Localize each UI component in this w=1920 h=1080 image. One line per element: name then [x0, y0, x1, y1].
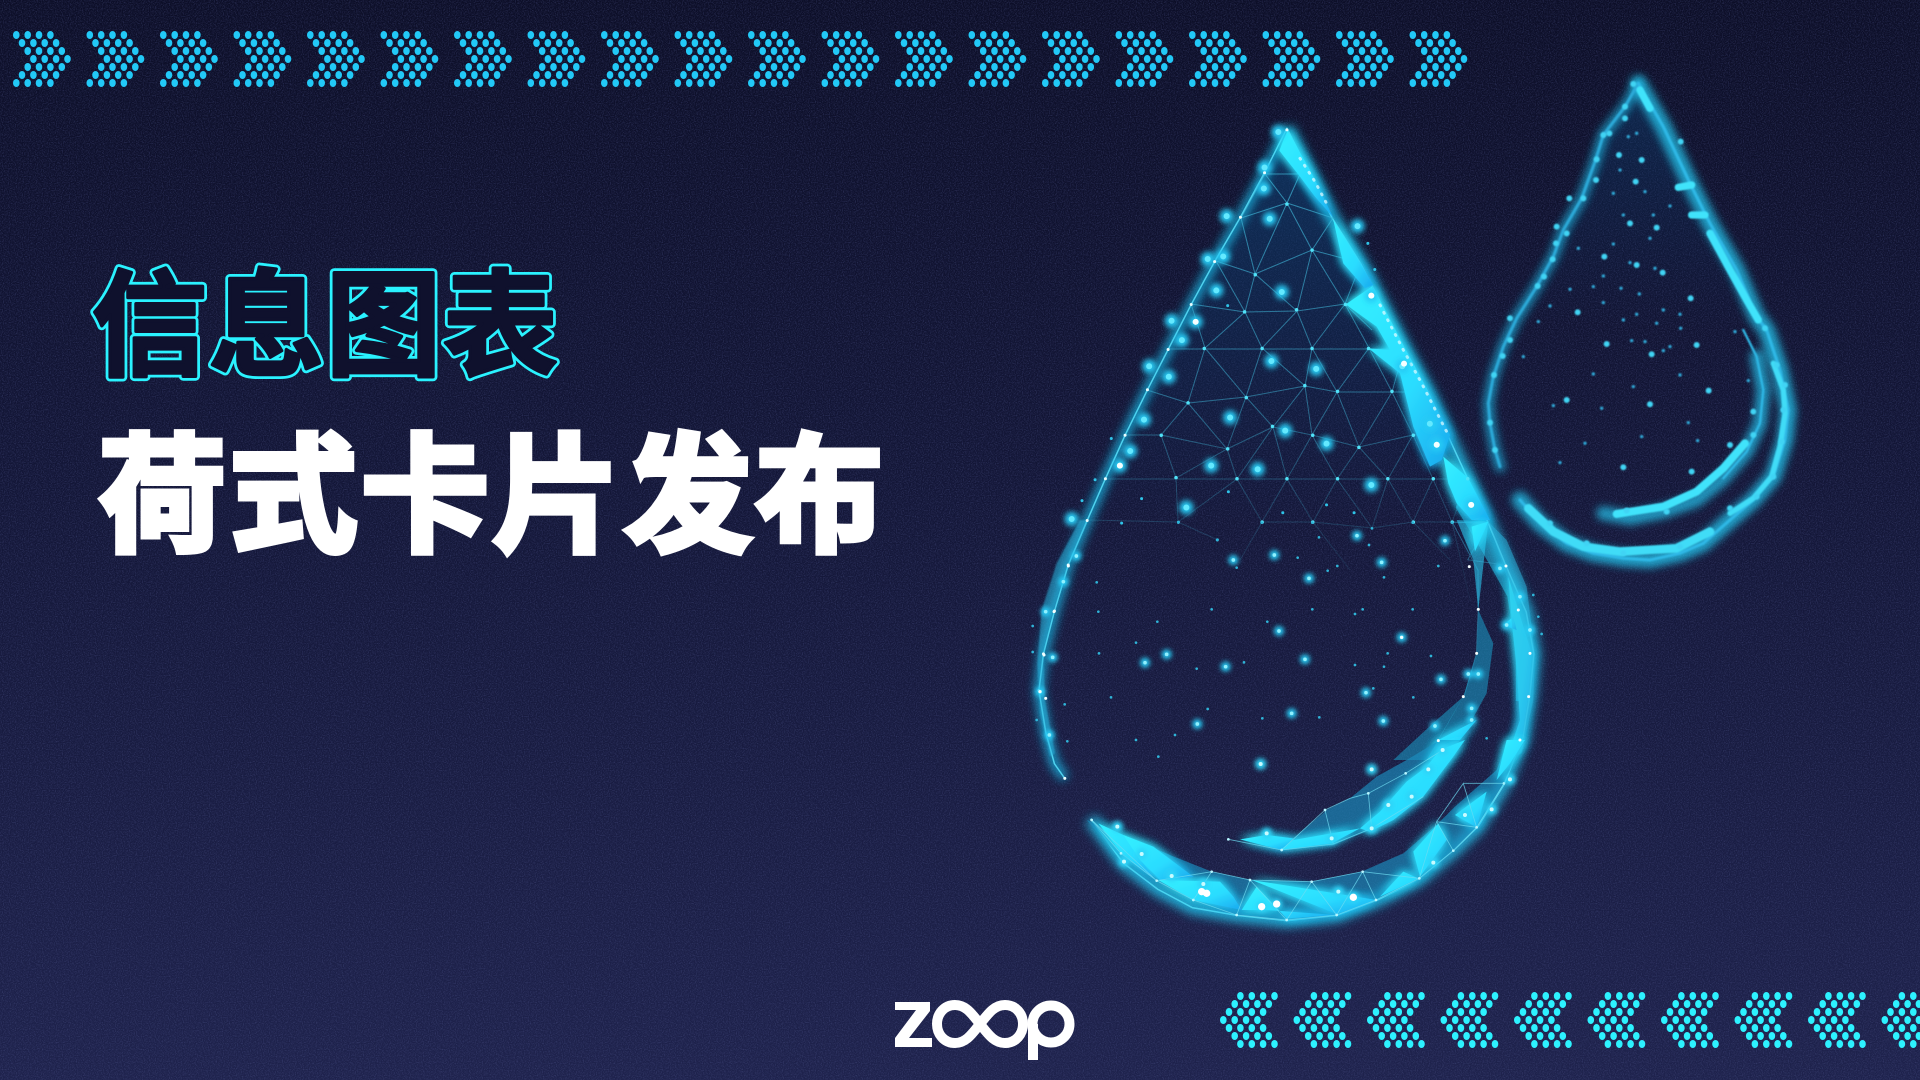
drop mesh lines [1087, 174, 1488, 600]
small drop rim glow [1488, 83, 1788, 560]
small drop bright strokes [1488, 83, 1788, 560]
drop glow dots middle [1033, 523, 1542, 757]
drop bottom crescents [1087, 740, 1525, 921]
drop rim and fill, mapped layer [1039, 128, 1534, 921]
arrows: top row of dotted chevrons [13, 31, 1467, 87]
icon: large water drop [1033, 128, 1542, 921]
small drop inner fill [1517, 83, 1767, 330]
heading: white title: 荷式卡片发布 [98, 426, 887, 569]
drop glow dots upper [1039, 130, 1471, 778]
arrows: bottom row of dotted chevrons [1220, 992, 1920, 1048]
drop upper right bright band [1279, 131, 1490, 520]
icon: small water drop [1488, 83, 1788, 560]
heading: outlined title: 信息图表 [92, 263, 560, 391]
small drop faint dots [1523, 133, 1748, 463]
small drop dots [1490, 84, 1785, 553]
drop middle rim and crescent [1037, 520, 1535, 760]
heading: outlined title: 信息图表 [92, 263, 560, 391]
logo: zoop [895, 1002, 1070, 1060]
